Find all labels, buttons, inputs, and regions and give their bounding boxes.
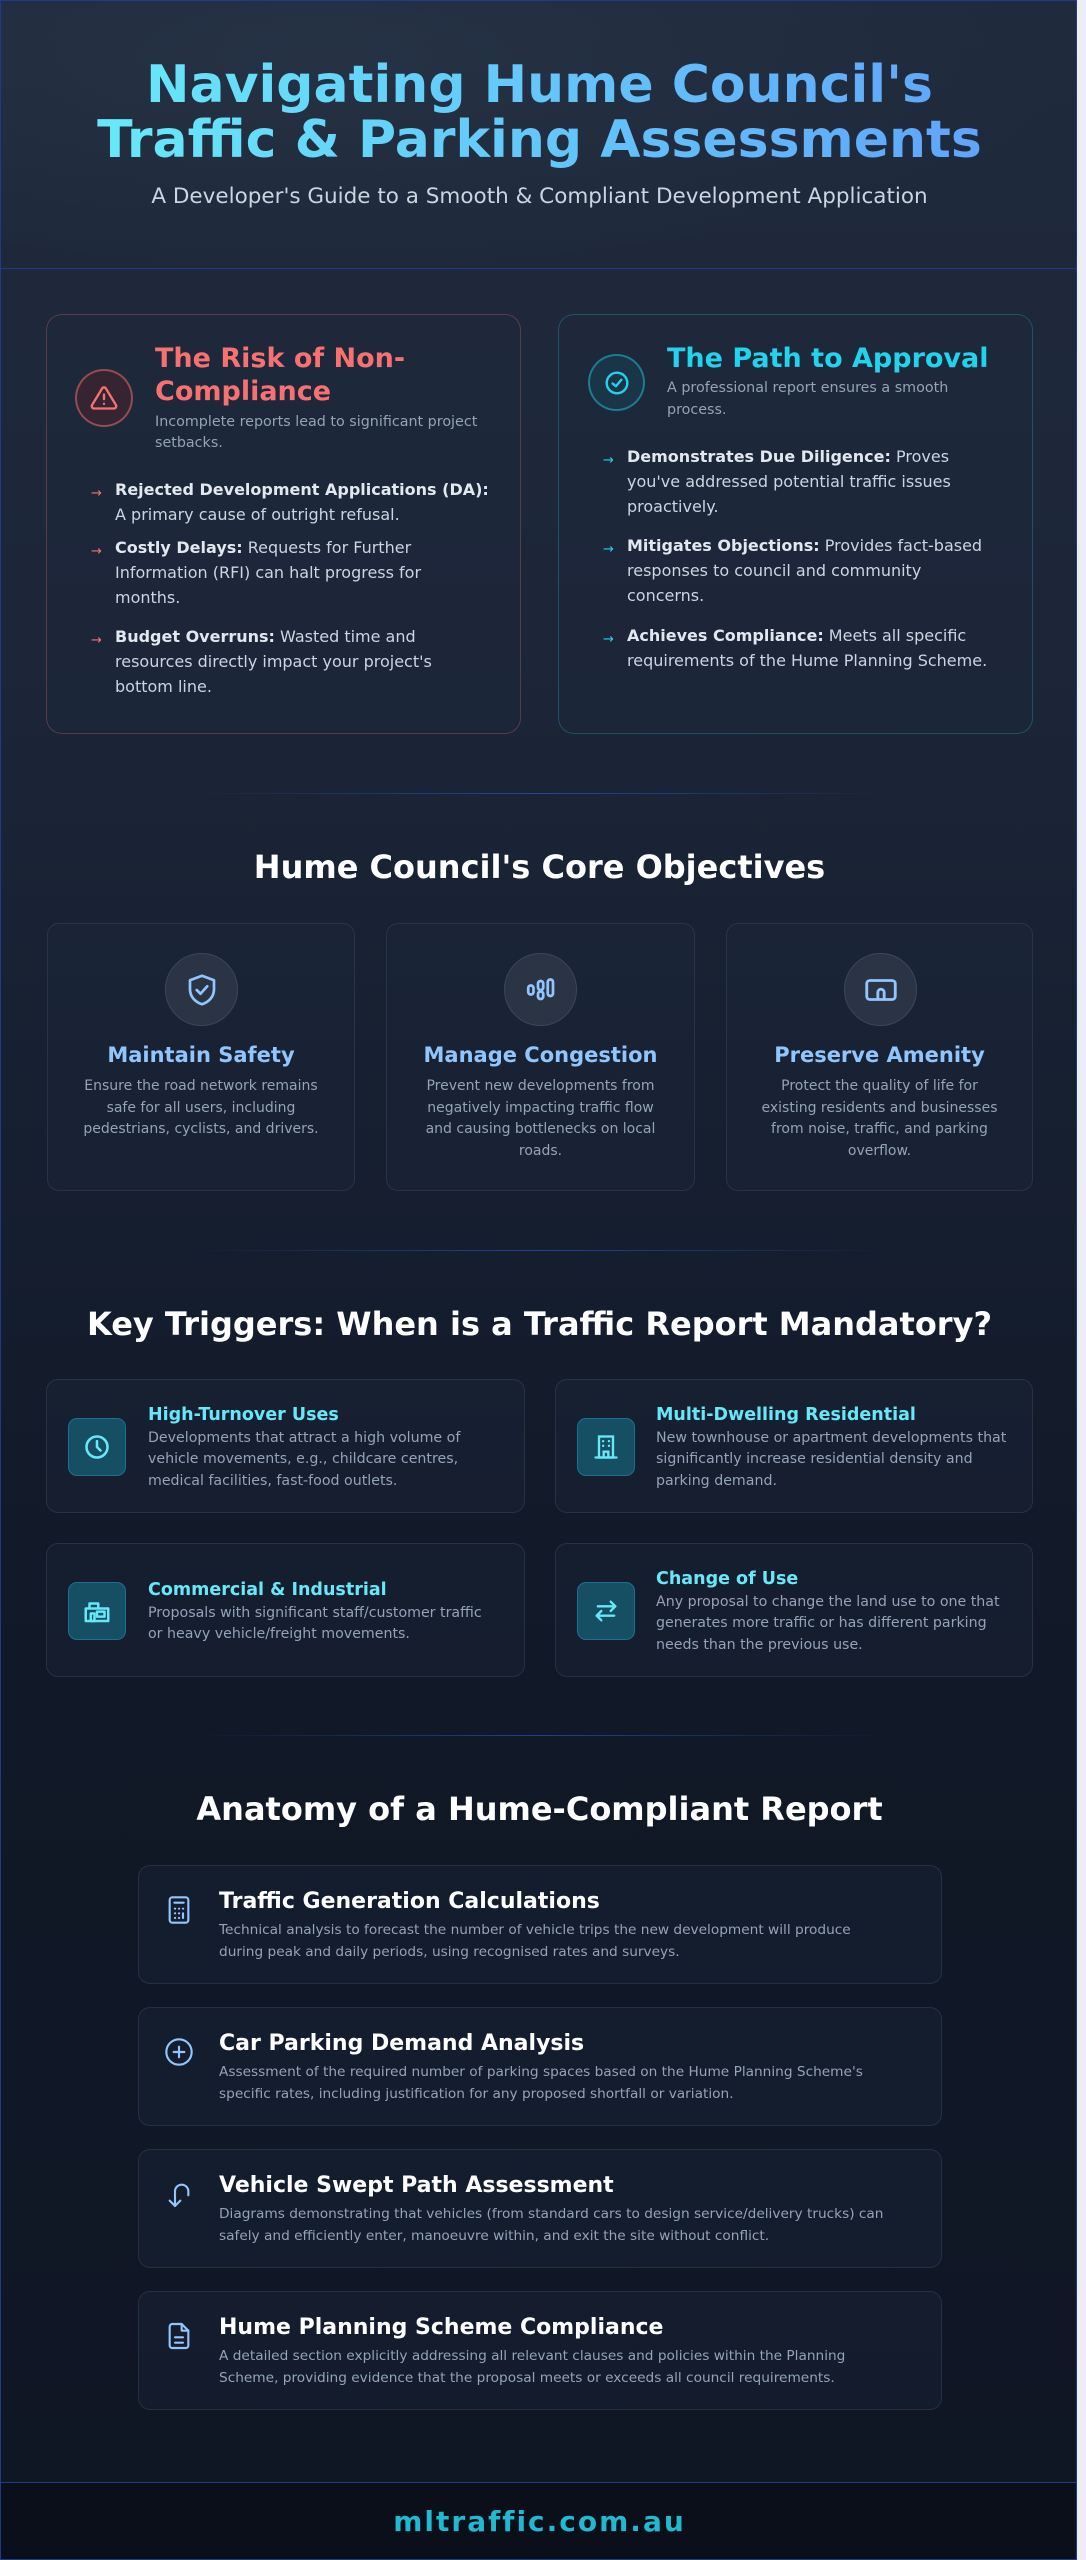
icon: clock [68, 1418, 126, 1476]
card: multi-dwelling residential: significantly increase residential density and [656, 1451, 973, 1467]
text: congestion desc: negatively impacting traffic flow [427, 1100, 654, 1116]
panel: risk of non-compliance [46, 314, 521, 734]
text: swept path: Vehicle Swept Path Assessment [219, 2173, 614, 2198]
bullet: due diligence: proactively. [627, 497, 719, 516]
text: amenity desc: Protect the quality of life for [781, 1078, 978, 1094]
text: congestion title: Manage Congestion [424, 1043, 657, 1067]
card: high-turnover uses: Developments that attract a high volume of [148, 1430, 460, 1446]
card: car parking demand: specific rates, including justification for any proposed shortfall or variation. [219, 2086, 734, 2102]
bullet: achieves compliance: Achieves Compliance: Meets all specific [627, 626, 966, 645]
card: high-turnover uses [46, 1379, 525, 1513]
text: congestion desc: and causing bottlenecks on local [426, 1121, 655, 1137]
card: commercial & industrial: or heavy vehicle/freight movements. [148, 1626, 410, 1642]
text: high-turnover: High-Turnover Uses [148, 1405, 339, 1425]
bullet: achieves compliance: requirements of the Hume Planning Scheme. [627, 651, 987, 670]
bullet: mitigates objections: concerns. [627, 586, 704, 605]
card: high-turnover uses: vehicle movements, e.g., childcare centres, [148, 1451, 458, 1467]
text: congestion desc: Prevent new developments from [426, 1078, 655, 1094]
bullet: costly delays: Information (RFI) can halt progress for [115, 563, 421, 582]
bullet: mitigates objections [603, 536, 982, 605]
text: approval subtitle: process. [667, 402, 726, 418]
text: safety desc: Ensure the road network remains [84, 1078, 318, 1094]
title [1, 58, 1078, 168]
icon: document [168, 2322, 190, 2350]
text: safety desc [83, 1078, 319, 1137]
heading: key triggers: Key Triggers: When is a Traffic Report Mandatory? [87, 1305, 992, 1343]
heading: approval: The Path to Approval [667, 343, 989, 374]
card: preserve amenity [726, 923, 1033, 1191]
card: planning scheme compliance: Scheme, providing evidence that the proposal meets or exceeds all council requirements. [219, 2370, 835, 2386]
bullet: due diligence: you've addressed potential traffic issues [627, 472, 951, 491]
text: risk subtitle: setbacks. [155, 434, 223, 450]
text: risk subtitle [155, 414, 477, 450]
text: compliance: Hume Planning Scheme Compliance [219, 2315, 663, 2340]
card: commercial & industrial [46, 1543, 525, 1677]
heading: risk: The Risk of Non- [155, 343, 405, 374]
bullet: costly delays: Costly Delays: Requests for Further [115, 538, 411, 557]
panel: risk of non-compliance: → [91, 544, 102, 559]
card: swept path: safely and efficiently enter, manoeuvre within, and exit the site without conflict. [219, 2228, 769, 2244]
card: commercial & industrial: Proposals with significant staff/customer traffic [148, 1605, 482, 1621]
icon: shield [165, 953, 238, 1026]
bullet: rejected DA: A primary cause of outright refusal. [115, 505, 400, 524]
bullet: mitigates objections: Mitigates Objections: Provides fact-based [627, 536, 982, 555]
card: traffic generation: Technical analysis to forecast the number of vehicle trips the new development will produce [219, 1922, 851, 1938]
text: traffic generation: Traffic Generation Calculations [219, 1889, 600, 1914]
panel: path to approval: → [603, 542, 614, 557]
panel: risk of non-compliance: → [91, 486, 102, 501]
card: change of use: Any proposal to change the land use to one that [656, 1594, 1000, 1610]
card: change of use [555, 1543, 1033, 1677]
card: swept path: Diagrams demonstrating that vehicles (from standard cars to design service/delivery trucks) can [219, 2206, 883, 2222]
card: change of use: generates more traffic or has different parking [656, 1615, 987, 1631]
bullet: due diligence: Demonstrates Due Diligence: Proves [627, 447, 949, 466]
card: traffic generation [138, 1865, 942, 1984]
icon: calculator [168, 1896, 190, 1924]
card: traffic generation: during peak and daily periods, using recognised rates and surveys. [219, 1944, 680, 1960]
bullet: due diligence [603, 447, 951, 516]
icon: u-turn arrow [168, 2184, 190, 2208]
bullet: budget overruns: Budget Overruns: Wasted time and [115, 627, 416, 646]
text: safety desc: pedestrians, cyclists, and drivers. [83, 1121, 319, 1137]
bullet: mitigates objections: responses to council and community [627, 561, 921, 580]
icon: plus circle [165, 2038, 193, 2066]
bullet: costly delays [91, 538, 422, 607]
panel: risk of non-compliance: → [91, 633, 102, 648]
bullet: budget overruns: bottom line. [115, 677, 212, 696]
bullet: rejected DA [91, 480, 489, 524]
card: planning scheme compliance: A detailed section explicitly addressing all relevant clauses and policies within the Planning [219, 2348, 845, 2364]
subtitle: A Developer's Guide to a Smooth & Compliant Development Application [151, 184, 928, 209]
icon: exchange arrows [577, 1582, 635, 1640]
heading: anatomy: Anatomy of a Hume-Compliant Report [196, 1790, 883, 1828]
text: parking demand: Car Parking Demand Analysis [219, 2031, 584, 2056]
icon: congestion [504, 953, 577, 1026]
text: amenity title: Preserve Amenity [774, 1043, 985, 1067]
panel: path to approval: → [603, 632, 614, 647]
text: approval subtitle [667, 380, 948, 418]
card: multi-dwelling residential [555, 1379, 1033, 1513]
text: amenity desc [762, 1078, 998, 1159]
card: multi-dwelling residential: parking demand. [656, 1473, 777, 1489]
icon: check circle [588, 354, 645, 411]
bullet: rejected DA: Rejected Development Applications (DA): [115, 480, 489, 499]
text: commercial: Commercial & Industrial [148, 1580, 387, 1600]
heading: core objectives: Hume Council's Core Objectives [254, 848, 825, 886]
card: planning scheme compliance [138, 2291, 942, 2410]
bullet: budget overruns [91, 627, 432, 696]
panel: path to approval: → [603, 453, 614, 468]
text: amenity desc: from noise, traffic, and parking [771, 1121, 988, 1137]
heading: risk [155, 343, 405, 407]
card: car parking demand [138, 2007, 942, 2126]
text: multi-dwelling: Multi-Dwelling Residential [656, 1405, 916, 1425]
title: Traffic & Parking Assessments [97, 110, 982, 170]
card: high-turnover uses: medical facilities, fast-food outlets. [148, 1473, 397, 1489]
text: website: mltraffic.com.au [393, 2505, 686, 2538]
card: multi-dwelling residential: New townhouse or apartment developments that [656, 1430, 1006, 1446]
icon: building [577, 1418, 635, 1476]
icon: warning [75, 369, 133, 427]
text: amenity desc: existing residents and businesses [762, 1100, 998, 1116]
heading: risk: Compliance [155, 376, 331, 407]
bullet: achieves compliance [603, 626, 987, 670]
card: car parking demand: Assessment of the required number of parking spaces based on the Hume Planning Scheme's [219, 2064, 863, 2080]
text: change of use: Change of Use [656, 1569, 798, 1589]
bullet: budget overruns: resources directly impact your project's [115, 652, 432, 671]
text: congestion desc: roads. [519, 1143, 562, 1159]
footer [1, 2482, 1078, 2560]
card: change of use: needs than the previous use. [656, 1637, 863, 1653]
text: approval subtitle: A professional report ensures a smooth [667, 380, 948, 396]
bullet: costly delays: months. [115, 588, 180, 607]
card: swept path [138, 2149, 942, 2268]
text: amenity desc: overflow. [848, 1143, 911, 1159]
header [1, 1, 1078, 269]
card: manage congestion [386, 923, 695, 1191]
panel: path to approval [558, 314, 1033, 734]
icon: amenity [844, 953, 917, 1026]
text: congestion desc [426, 1078, 655, 1159]
icon: factory [68, 1582, 126, 1640]
text: risk subtitle: Incomplete reports lead to significant project [155, 414, 477, 430]
text: safety desc: safe for all users, including [107, 1100, 295, 1116]
text: safety title: Maintain Safety [107, 1043, 295, 1067]
card: maintain safety [47, 923, 355, 1191]
title: Navigating Hume Council's [146, 55, 933, 115]
